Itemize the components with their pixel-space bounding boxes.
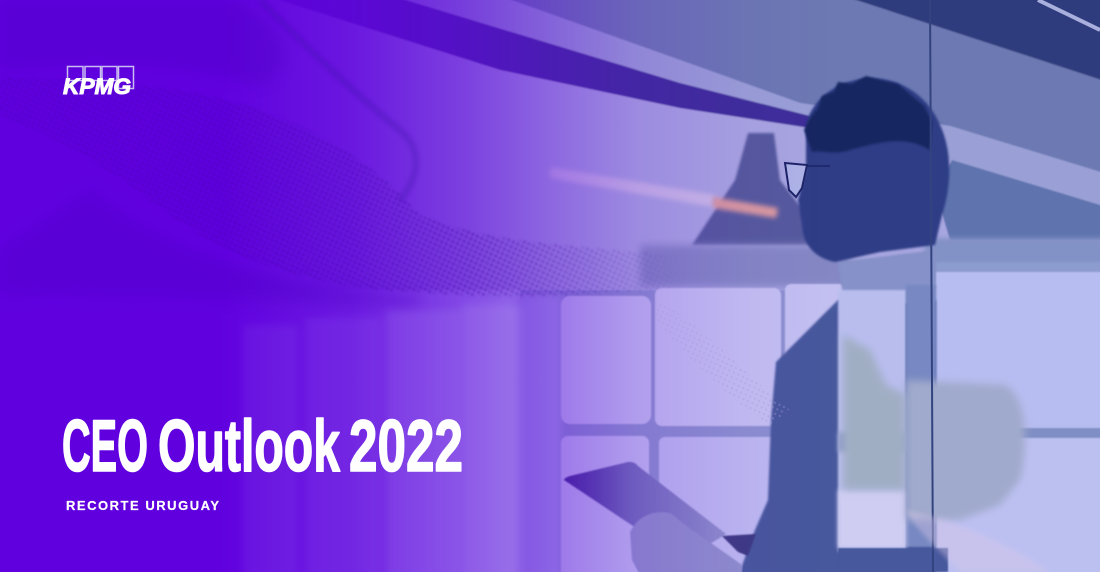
glass reflection panels (838, 285, 1025, 572)
title: 2022 (349, 406, 463, 487)
logo: KPMG (63, 66, 134, 99)
light mesh on windows (655, 300, 790, 425)
subtitle: RECORTE URUGUAY (66, 498, 219, 513)
person: head (798, 78, 949, 262)
person: glasses (785, 163, 830, 197)
title: Outlook (158, 406, 340, 487)
logo wordmark: KPMG (63, 74, 131, 99)
light mesh bottom right (906, 510, 1050, 572)
glass vertical line (930, 0, 933, 572)
dark wave lines (0, 0, 420, 305)
top-right light strip (1038, 0, 1100, 30)
window reflections on purple (243, 305, 522, 572)
window panes (515, 272, 1100, 572)
person: body (735, 300, 936, 572)
dotted wave mesh (0, 78, 720, 296)
title (62, 406, 463, 487)
title: CEO (62, 406, 148, 487)
tablet and hand (564, 462, 756, 572)
logo boxes (68, 66, 134, 88)
person: neck (838, 250, 935, 310)
person: hair (804, 76, 932, 152)
